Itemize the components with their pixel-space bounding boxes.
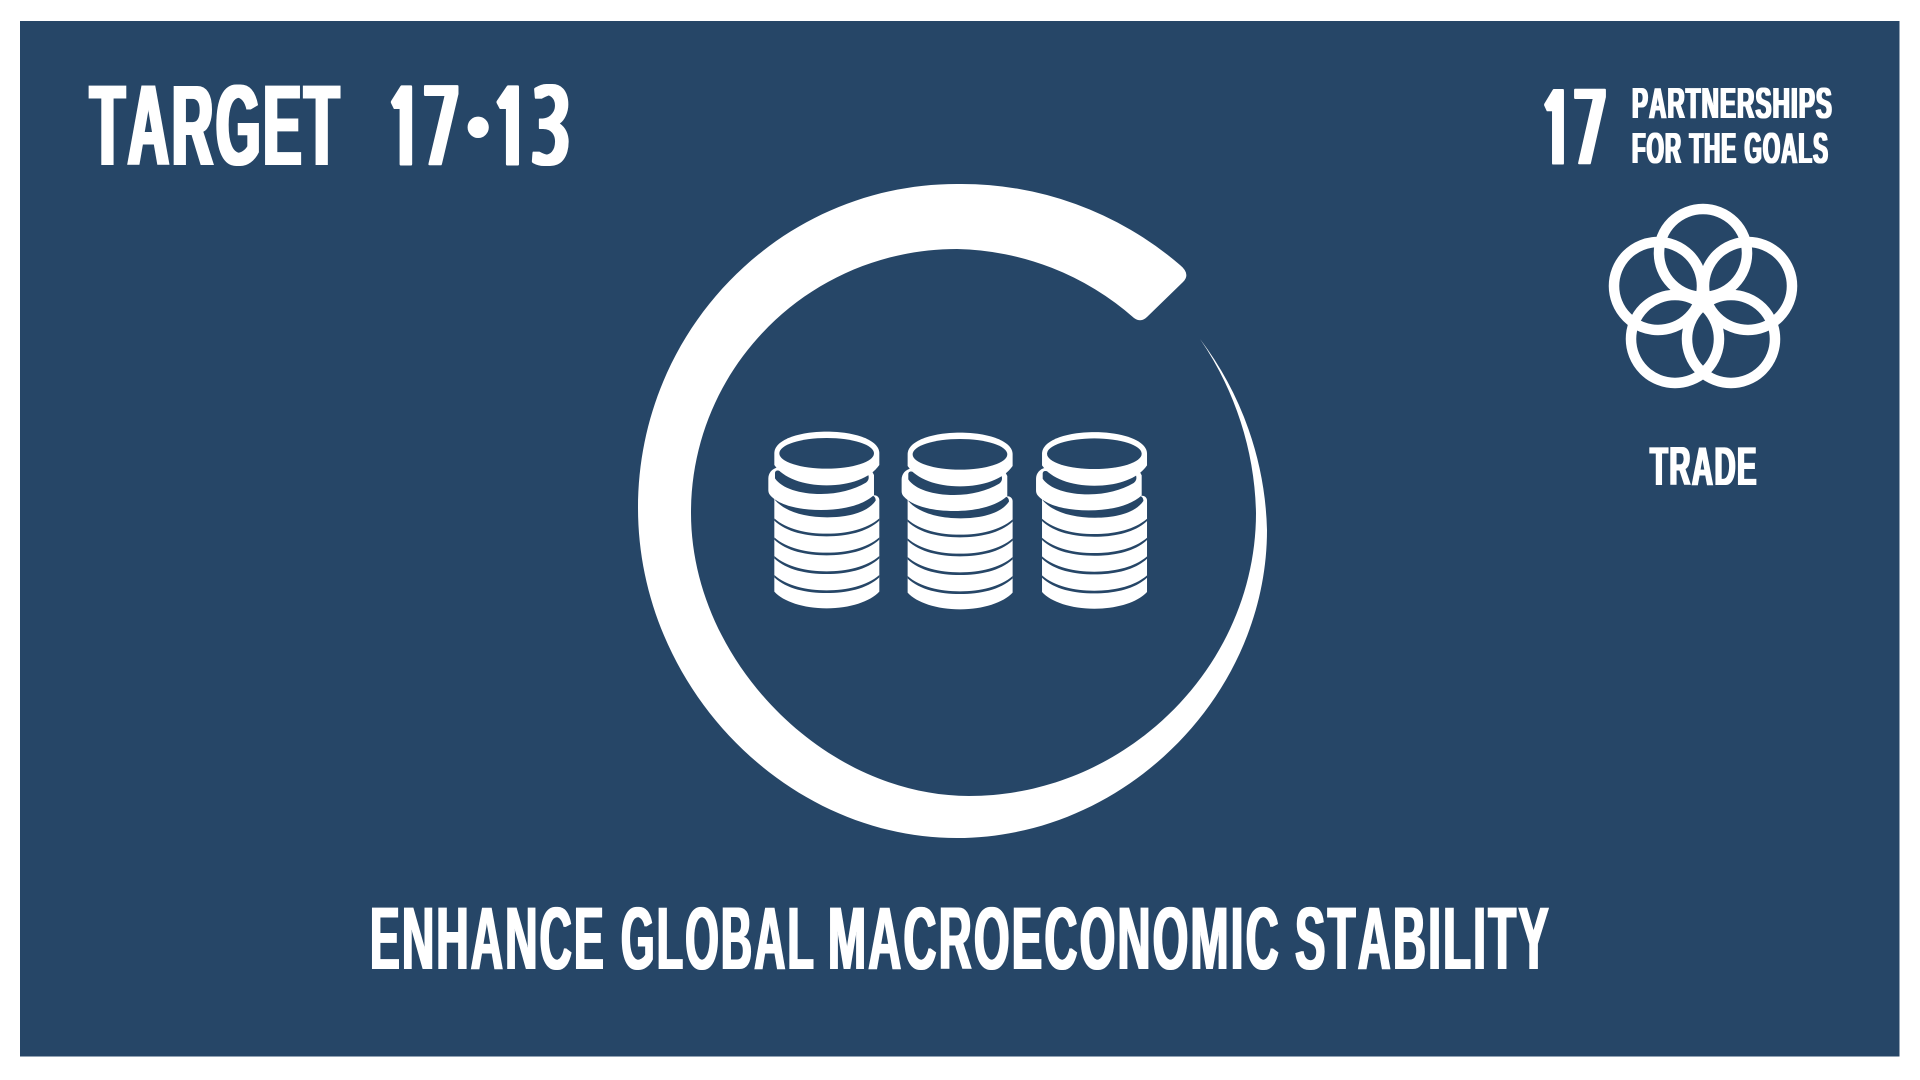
icon: five interlocking rings (1614, 209, 1792, 383)
title: target number: • (465, 85, 495, 168)
coin stack middle (902, 433, 1013, 609)
coin stack left (768, 432, 879, 608)
open ring surrounding the icon (638, 184, 1267, 838)
title: target number: TARGET (90, 62, 342, 190)
category label: trade: TRADE (1650, 435, 1758, 497)
goal number and name: 17 (1540, 81, 1607, 179)
coin stack right (1036, 432, 1147, 609)
bottom heading: STABILITY (1295, 888, 1551, 988)
bottom heading: GLOBAL (621, 888, 816, 988)
goal number and name (1540, 80, 1833, 179)
title: target number: 13 (491, 77, 571, 181)
bottom heading: ENHANCE (370, 888, 606, 988)
title: target number: 17 (386, 77, 460, 181)
icon: three stacks of coins (768, 432, 1147, 609)
bottom heading (370, 888, 1551, 988)
bottom heading: MACROECONOMIC (828, 888, 1281, 988)
